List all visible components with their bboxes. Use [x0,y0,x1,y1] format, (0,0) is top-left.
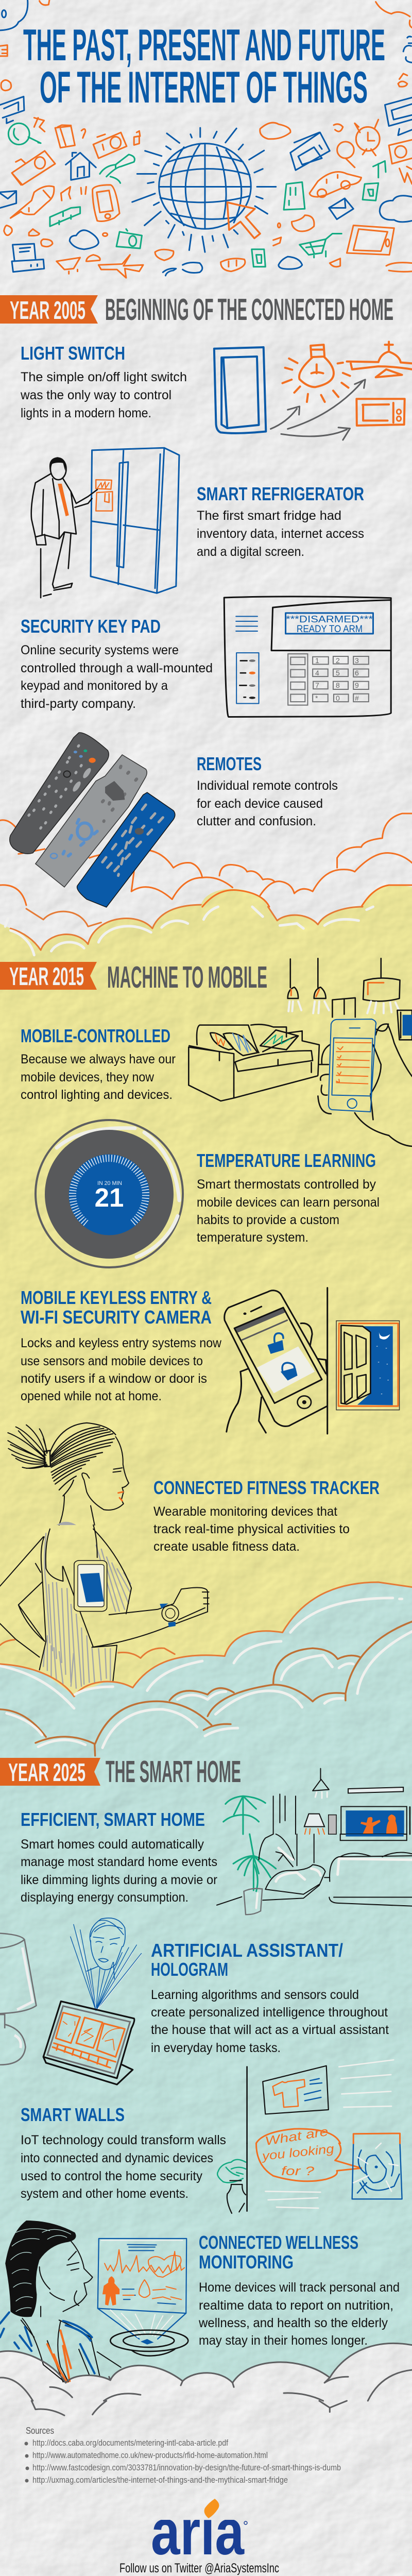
text block: used to control the home security [21,2169,202,2183]
text block: Home devices will track personal and [199,2280,400,2295]
text block: track real-time physical activities to [153,1522,350,1536]
panel: connected wellness monitoring [0,2221,400,2383]
text block: displaying energy consumption. [21,1890,188,1905]
icon: phone unlocking door [225,1288,400,1434]
icon: cursor arrow [227,202,260,238]
sources [25,2426,341,2485]
banner: year 2015 [0,962,97,991]
section: year 2025 [0,1755,412,2383]
icon: smart living room lower [217,1834,412,1914]
panel: connected fitness tracker [0,1423,380,1696]
text block: like dimming lights during a movie or [21,1873,217,1887]
icons: orange doodles [0,0,412,278]
text block [151,1988,389,2055]
footer logo: aria [152,2499,248,2555]
heading: MOBILE KEYLESS ENTRY & [21,1287,212,1308]
heading: MONITORING [199,2251,294,2273]
hero illustration: globe and connected device doodles [0,0,412,278]
panel: mobile-controlled [21,958,412,1146]
text block: IoT technology could transform walls [21,2133,226,2147]
cloud outlines: teal to grey [0,2343,412,2401]
panel: smart walls [21,2060,402,2213]
icon: wall-mounted keypad: 5 [336,669,340,677]
icon: thermostat dial: 21 [95,1183,124,1212]
icon: wall-mounted keypad: 0 [336,694,340,702]
icon: flame [204,2499,219,2518]
icon: smart living room upper [224,1769,410,1834]
cloud outlines: yellow to teal [0,1582,412,1756]
text block [21,1336,222,1403]
heading: LIGHT SWITCH [21,343,125,364]
icon: thermostat dial [36,1120,183,1267]
icon: tablet projecting hologram face [43,1918,141,2084]
section: year 2015 [0,958,412,1696]
heading: WI-FI SECURITY CAMERA [21,1307,212,1328]
icon: interactive wall: for ? [281,2164,315,2178]
text block: use sensors and mobile devices to [21,1354,203,1368]
text block: clutter and confusion. [197,814,316,828]
panel: smart refrigerator [31,448,364,598]
text block: was the only way to control [20,388,171,402]
icon: wall-mounted keypad: READY TO ARM [297,624,363,635]
icon: wall-mounted keypad: 9 [355,681,359,689]
heading [21,1287,212,1328]
text block [21,1052,176,1102]
panel: mobile keyless entry and wi-fi security camera [21,1287,400,1434]
icon: wall-mounted keypad: 4 [315,669,319,677]
icon: thermostat dial: IN 20 MIN [97,1180,122,1187]
text block [198,2280,400,2348]
text block: The first smart fridge had [197,509,341,523]
panel: light switch [20,342,412,440]
text block [153,1504,350,1554]
text block: control lighting and devices. [21,1088,173,1102]
icon: man and refrigerator [31,448,179,598]
heading: SECURITY KEY PAD [21,616,161,637]
text block: create usable fitness data. [153,1539,300,1554]
icon: three remote controls [10,733,175,907]
source list [25,2438,341,2485]
text block: mobile devices can learn personal [197,1195,380,1210]
panel: security key pad [21,597,391,717]
text block: third-party company. [21,697,136,711]
text block: into connected and dynamic devices [21,2151,213,2165]
icon: interactive wall: you looking [261,2142,335,2163]
icon: wall-mounted keypad [224,597,391,717]
text block: inventory data, internet access [197,527,364,541]
text block: create personalized intelligence throughout [151,2005,388,2020]
heading [199,2232,358,2273]
text block: in everyday home tasks. [151,2041,281,2055]
text block: notify users if a window or door is [21,1371,207,1386]
icon: wall-mounted keypad: # [355,694,359,702]
heading: EFFICIENT, SMART HOME [21,1809,205,1830]
banner: year 2005 [0,295,98,325]
icon: wall-mounted keypad: * [315,694,318,702]
text block: The simple on/off light switch [21,370,187,384]
title [23,21,385,112]
banner: year 2025: YEAR 2025 [8,1759,85,1787]
icon: woman with fitness tracker body [0,1525,209,1696]
icons: green doodles [8,123,386,267]
text block: controlled through a wall-mounted [21,661,213,675]
text block: Individual remote controls [197,778,338,793]
text block: Smart homes could automatically [21,1837,204,1852]
text block: Locks and keyless entry systems now [21,1336,222,1350]
panel: artificial assistant / hologram [0,1918,389,2084]
panel: temperature learning [36,1120,380,1267]
decorative clouds [0,814,412,907]
icon: wall-mounted keypad: 1 [315,656,319,665]
text block: lights in a modern home. [21,406,151,420]
heading: REMOTES [197,753,262,774]
heading: ARTIFICIAL ASSISTANT/ [151,1940,343,1961]
section: year 2025: THE SMART HOME [106,1755,241,1789]
section: year 2005 [0,293,412,907]
text block: temperature system. [197,1230,308,1245]
source list: http://uxmag.com/articles/the-internet-of-things-and-the-mythical-smart-fridge [32,2475,288,2485]
text block: Online security systems were [21,643,179,657]
text block: system and other home events. [21,2187,188,2201]
source list: http://www.fastcodesign.com/3033781/innovation-by-design/the-future-of-smart-things-is-dumb [32,2463,341,2472]
heading [151,1940,343,1980]
icon: interactive wall: What are [264,2125,329,2148]
source list: http://docs.caba.org/documents/metering-intl-caba-article.pdf [32,2438,228,2448]
icon: globe [132,128,276,252]
icon: lamp [0,1933,36,2065]
text block [197,509,364,559]
icon: wall-mounted keypad: ***DISARMED*** [286,614,373,624]
icon: wall-mounted keypad: 2 [336,656,340,665]
text block: opened while not at home. [21,1389,162,1403]
icons: blue doodles [0,0,412,276]
cloud outline: grey to yellow [5,905,373,955]
text block: Because we always have our [21,1052,176,1066]
text block [20,370,187,420]
footer follow text: Follow us on Twitter @AriaSystemsInc [119,2561,279,2575]
banner: year 2025 [0,1758,100,1787]
banner: year 2005: YEAR 2005 [10,297,85,325]
heading: sources: Sources [26,2426,54,2436]
source list: http://www.automatedhome.co.uk/new-products/rfid-home-automation.html [32,2450,268,2460]
text block: and a digital screen. [197,545,304,559]
icon: wall-mounted keypad: 6 [355,669,359,677]
text block: Smart thermostats controlled by [197,1177,376,1192]
text block: the house that will act as a virtual assistant [151,2023,389,2037]
icon: wall-mounted keypad: 7 [315,681,319,689]
icon: wall-mounted keypad: 3 [355,656,359,665]
icon: wall-mounted keypad: 8 [336,681,340,689]
text block [21,1837,217,1905]
text block: may stay in their homes longer. [199,2333,368,2348]
text block [197,778,338,828]
text block: manage most standard home events [21,1855,217,1869]
icon: sofa, lamps and phone in hand [188,958,412,1146]
text block [21,2133,226,2201]
banner: year 2015: YEAR 2015 [9,963,84,991]
heading: SMART WALLS [21,2104,125,2125]
text block: wellness, and health so the elderly [198,2316,388,2330]
heading: MOBILE-CONTROLLED [21,1025,170,1046]
panel: remotes [0,733,412,907]
text block: Wearable monitoring devices that [153,1504,337,1519]
icon: switch controlling light, fan and microwave [214,342,412,440]
text block [21,643,213,711]
icon: woman with fitness tracker head [8,1423,129,1525]
heading: HOLOGRAM [151,1959,228,1980]
text block: keypad and monitored by a [21,679,168,693]
text block [197,1177,380,1245]
text block: mobile devices, they now [21,1070,154,1084]
text block: habits to provide a custom [197,1213,339,1227]
icon: interactive wall [217,2060,402,2213]
footer logo: aria: aria [151,2496,245,2568]
text block: for each device caused [197,796,323,811]
heading: SMART REFRIGERATOR [197,483,364,504]
text block: realtime data to report on nutrition, [199,2298,393,2313]
icon: woman viewing health hologram [0,2221,188,2383]
panel: efficient, smart home [21,1769,412,1914]
text block: Learning algorithms and sensors could [151,1988,359,2002]
